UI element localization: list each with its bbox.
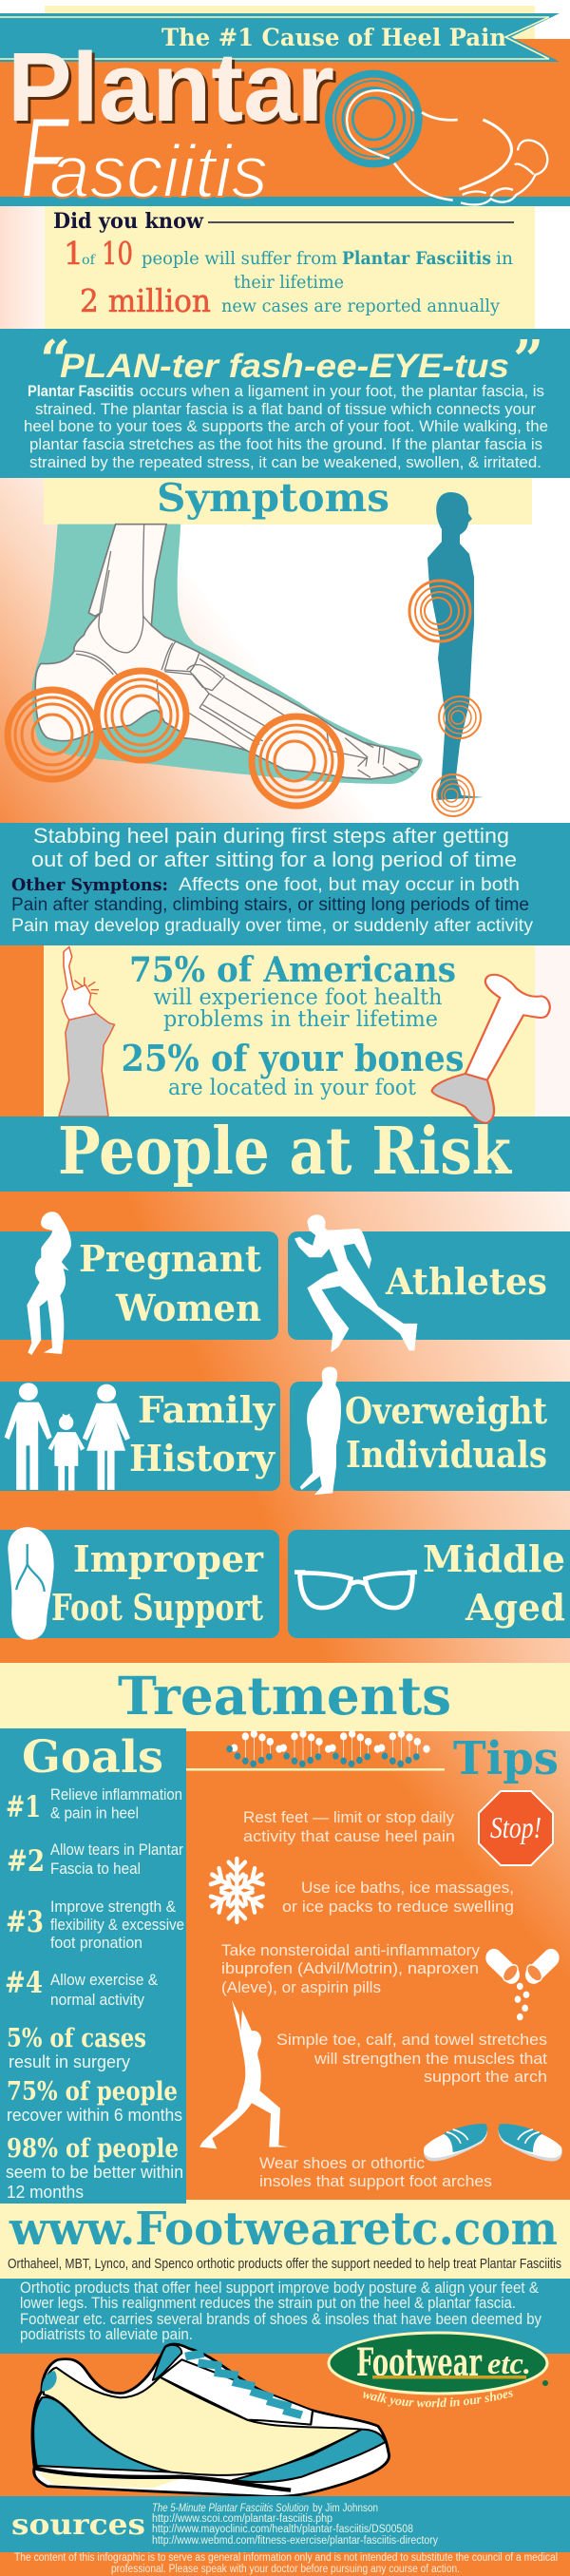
- stat: 75 percent: [129, 950, 456, 1032]
- stat: 75 percent: will experience foot health: [154, 985, 443, 1010]
- ribbon: [0, 13, 560, 62]
- card: middle aged: Aged: [465, 1586, 565, 1629]
- panel: website: [8, 2203, 561, 2272]
- recovery statistics: 5% of cases: [7, 2024, 146, 2053]
- panel: orthotic info: Orthotic products that offer heel support improve body posture & align your feet &: [20, 2280, 539, 2297]
- tagline: [363, 2391, 513, 2408]
- recovery statistics: result in surgery: [9, 2052, 130, 2071]
- tip: stretches: will strengthen the muscles that: [314, 2051, 547, 2068]
- other symptoms: Other Symptons:: [11, 875, 168, 895]
- stat: 25 percent: are located in your foot: [168, 1076, 417, 1100]
- icon: snowflake: [208, 1859, 266, 1922]
- tagline: walk your world in our shoes: [363, 2391, 513, 2408]
- goal 3: flexibility & excessive: [50, 1917, 184, 1934]
- recovery statistics: [6, 2024, 183, 2202]
- goal 2: #2: [7, 1844, 45, 1879]
- recovery statistics: 12 months: [7, 2183, 84, 2202]
- goal 3: Improve strength &: [50, 1899, 176, 1916]
- heading: sources: [11, 2509, 145, 2542]
- website heading: www.Footwearetc.com: [9, 2203, 558, 2256]
- panel: did you know: [53, 209, 514, 319]
- panel: symptom text: [0, 823, 570, 945]
- recovery statistics: 75% of people: [7, 2077, 178, 2107]
- goal 3: foot pronation: [50, 1935, 142, 1952]
- icon: shoes: [424, 2124, 562, 2162]
- stat: 1 of 10: their lifetime: [234, 272, 344, 293]
- source list: [152, 2503, 438, 2547]
- source list: The 5-Minute Plantar Fasciitis Solution: [152, 2503, 309, 2514]
- card: middle aged: [288, 1530, 570, 1638]
- pronunciation: ”: [513, 329, 543, 391]
- card: pregnant women: [0, 1212, 278, 1355]
- card: overweight individuals: [290, 1366, 570, 1495]
- tip: rest: Rest feet — limit or stop daily: [243, 1809, 455, 1826]
- definition text: plantar fascia stretches as the foot hits the ground. If the plantar fascia is: [29, 436, 542, 453]
- stat: 2 million: new cases are reported annually: [221, 296, 500, 316]
- icon: body silhouette with rings: [409, 492, 484, 816]
- source list: http://www.webmd.com/fitness-exercise/plantar-fasciitis-directory: [152, 2535, 438, 2547]
- definition text: occurs when a ligament in your foot, the plantar fascia, is: [140, 383, 544, 400]
- card: overweight individuals: Overweight: [345, 1389, 547, 1432]
- panel: people at risk: [0, 1114, 570, 1663]
- title: Fasciitis: [21, 94, 268, 221]
- title: Fasciitis: asciitis: [49, 129, 268, 213]
- panel: pronunciation and definition: [0, 329, 570, 478]
- panel: sources: [0, 2496, 570, 2552]
- card: middle aged: Middle: [423, 1537, 565, 1580]
- panel: tips: [186, 1730, 570, 2200]
- card: pregnant women: Women: [115, 1287, 261, 1329]
- stat: 25 percent: [122, 1037, 464, 1100]
- recovery statistics: seem to be better within: [6, 2163, 183, 2182]
- tip: medicine: (Aleve), or aspirin pills: [221, 1979, 381, 1996]
- main symptom: [31, 824, 517, 871]
- icon: stop sign: [479, 1791, 553, 1865]
- panel: goals: [0, 1728, 186, 2204]
- pronunciation: “: [40, 329, 70, 391]
- tip: insoles: Wear shoes or othortic: [259, 2155, 425, 2172]
- card: overweight individuals: Individuals: [346, 1433, 547, 1476]
- goal 4: [5, 1966, 158, 2009]
- recovery statistics: recover within 6 months: [7, 2106, 182, 2125]
- card: improper foot support: Improper: [73, 1537, 264, 1580]
- goal 1: Relieve inflammation: [50, 1786, 182, 1803]
- stat: 75 percent: problems in their lifetime: [163, 1007, 438, 1032]
- panel: goals: Goals: [22, 1731, 163, 1784]
- icon: bone: [432, 975, 550, 1123]
- icon: pills: [494, 1957, 551, 2020]
- definition text: [24, 383, 548, 471]
- stat: 25 percent: 25% of your bones: [122, 1037, 464, 1079]
- stat: 1 of 10: 1: [64, 235, 84, 272]
- title: Fasciitis: F: [21, 94, 70, 221]
- goal 1: #1: [6, 1790, 41, 1824]
- panel: shoe and logo: [0, 2332, 570, 2496]
- recovery statistics: 98% of people: [7, 2134, 179, 2164]
- stat: 2 million: [80, 282, 500, 319]
- card: family history: Family: [138, 1388, 276, 1431]
- goal 2: [7, 1841, 183, 1879]
- panel: orthotic info: [0, 2279, 570, 2354]
- heading: People at Risk: [58, 1114, 513, 1190]
- main symptom: Stabbing heel pain during first steps after getting: [33, 824, 509, 848]
- logo: Footwear etc: etc.: [487, 2346, 531, 2380]
- heading: Did you know: [53, 209, 204, 234]
- card: family history: History: [129, 1437, 276, 1479]
- card: pregnant women: Pregnant: [79, 1237, 261, 1280]
- tip: rest: activity that cause heel pain: [243, 1828, 455, 1845]
- source list: http://www.scoi.com/plantar-fasciitis.php: [152, 2513, 332, 2525]
- panel: disclaimer: professional. Please speak with your doctor before pursuing any course of action.: [111, 2564, 460, 2575]
- panel: disclaimer: [0, 2552, 570, 2576]
- title: Plantar: Plantar: [8, 32, 334, 142]
- stat: 1 of 10: 10: [102, 235, 133, 272]
- panel: orthotic info: podiatrists to alleviate pain.: [20, 2326, 193, 2343]
- pronunciation: [40, 329, 543, 391]
- title: Plantar: Plantar: [10, 35, 337, 144]
- goal 3: #3: [6, 1905, 44, 1939]
- card: family history: [0, 1382, 280, 1491]
- panel: foot statistics: [0, 945, 570, 1116]
- card: improper foot support: [0, 1527, 279, 1640]
- stat: 75 percent: 75% of Americans: [129, 950, 456, 990]
- icon: foot skeleton: [31, 525, 423, 784]
- card: athletes: Athletes: [385, 1260, 547, 1303]
- card: athletes: [288, 1214, 570, 1352]
- other symptoms: [11, 875, 534, 936]
- stat: 1 of 10: of: [82, 253, 97, 268]
- main symptom: out of bed or after sitting for a long period of time: [31, 848, 517, 871]
- tip: ice: [282, 1880, 514, 1916]
- tip: insoles: [259, 2155, 492, 2190]
- stat: 1 of 10: Plantar Fasciitis: [342, 248, 491, 269]
- stat: 2 million: 2 million: [80, 282, 211, 319]
- icon: stop sign: Stop!: [490, 1810, 542, 1844]
- panel: symptoms: [0, 475, 570, 823]
- goal 2: Fascia to heal: [50, 1860, 141, 1878]
- icon: dna strand: [226, 1730, 429, 1767]
- goal 4: Allow exercise &: [50, 1972, 158, 1989]
- other symptoms: Pain may develop gradually over time, or suddenly after activity: [11, 916, 534, 936]
- icon: yoga figure: [200, 2000, 288, 2148]
- source list: by Jim Johnson: [313, 2503, 378, 2514]
- other symptoms: Affects one foot, but may occur in both: [179, 875, 520, 895]
- tip: stretches: Simple toe, calf, and towel stretches: [276, 2032, 547, 2049]
- tip: medicine: Take nonsteroidal anti-inflammatory: [221, 1942, 481, 1959]
- logo: Footwear etc: [329, 2333, 548, 2394]
- icon: running shoe: [32, 2344, 390, 2496]
- panel: header: [0, 6, 570, 329]
- icon: statue of liberty: [59, 947, 115, 1116]
- goal 4: #4: [5, 1966, 43, 2000]
- goal 1: [6, 1786, 182, 1824]
- heading: Treatments: [118, 1665, 451, 1727]
- icon: target rings on foot: [8, 671, 341, 806]
- other symptoms: Pain after standing, climbing stairs, or sitting long periods of time: [11, 895, 529, 915]
- tip: medicine: ibuprofen (Advil/Motrin), naproxen: [221, 1960, 479, 1977]
- definition text: strained by the repeated stress, it can be weakened, swollen, & irritated.: [29, 454, 542, 471]
- tip: medicine: [221, 1942, 481, 1996]
- definition text: strained. The plantar fascia is a flat band of tissue which connects your: [35, 401, 537, 418]
- logo: Footwear etc: Footwear: [356, 2340, 483, 2385]
- stat: 1 of 10: in: [496, 248, 513, 269]
- stat: 1 of 10: people will suffer from: [142, 248, 337, 269]
- icon: foot outline with target rings: [329, 74, 547, 204]
- goal 1: & pain in heel: [50, 1805, 139, 1822]
- definition text: Plantar Fasciitis: [28, 383, 134, 400]
- panel: orthotic info: lower legs. This realignment reduces the strain put on the heel & plantar fascia.: [20, 2295, 516, 2312]
- pronunciation: PLAN-ter fash-ee-EYE-tus: [60, 348, 509, 385]
- tip: rest: [243, 1809, 455, 1845]
- tip: stretches: [276, 2032, 547, 2086]
- goal 2: Allow tears in Plantar: [50, 1841, 183, 1859]
- tip: ice: or ice packs to reduce swelling: [282, 1899, 514, 1916]
- goal 4: normal activity: [50, 1992, 145, 2009]
- definition text: heel bone to your toes & supports the arch of your foot. While walking, the: [24, 418, 548, 435]
- tip: ice: Use ice baths, ice massages,: [301, 1880, 514, 1897]
- heading: Tips: [453, 1732, 559, 1785]
- heading: Symptoms: [157, 475, 390, 521]
- source list: http://www.mayoclinic.com/health/plantar-fasciitis/DS00508: [152, 2524, 413, 2535]
- goal 3: [6, 1899, 184, 1952]
- tip: insoles: insoles that support foot arches: [259, 2173, 492, 2190]
- panel: treatments: [0, 1663, 570, 2279]
- subtitle: The #1 Cause of Heel Pain: [162, 24, 506, 51]
- stat: 1 of 10: [64, 235, 513, 293]
- tip: stretches: support the arch: [424, 2069, 547, 2086]
- card: improper foot support: Foot Support: [51, 1586, 263, 1629]
